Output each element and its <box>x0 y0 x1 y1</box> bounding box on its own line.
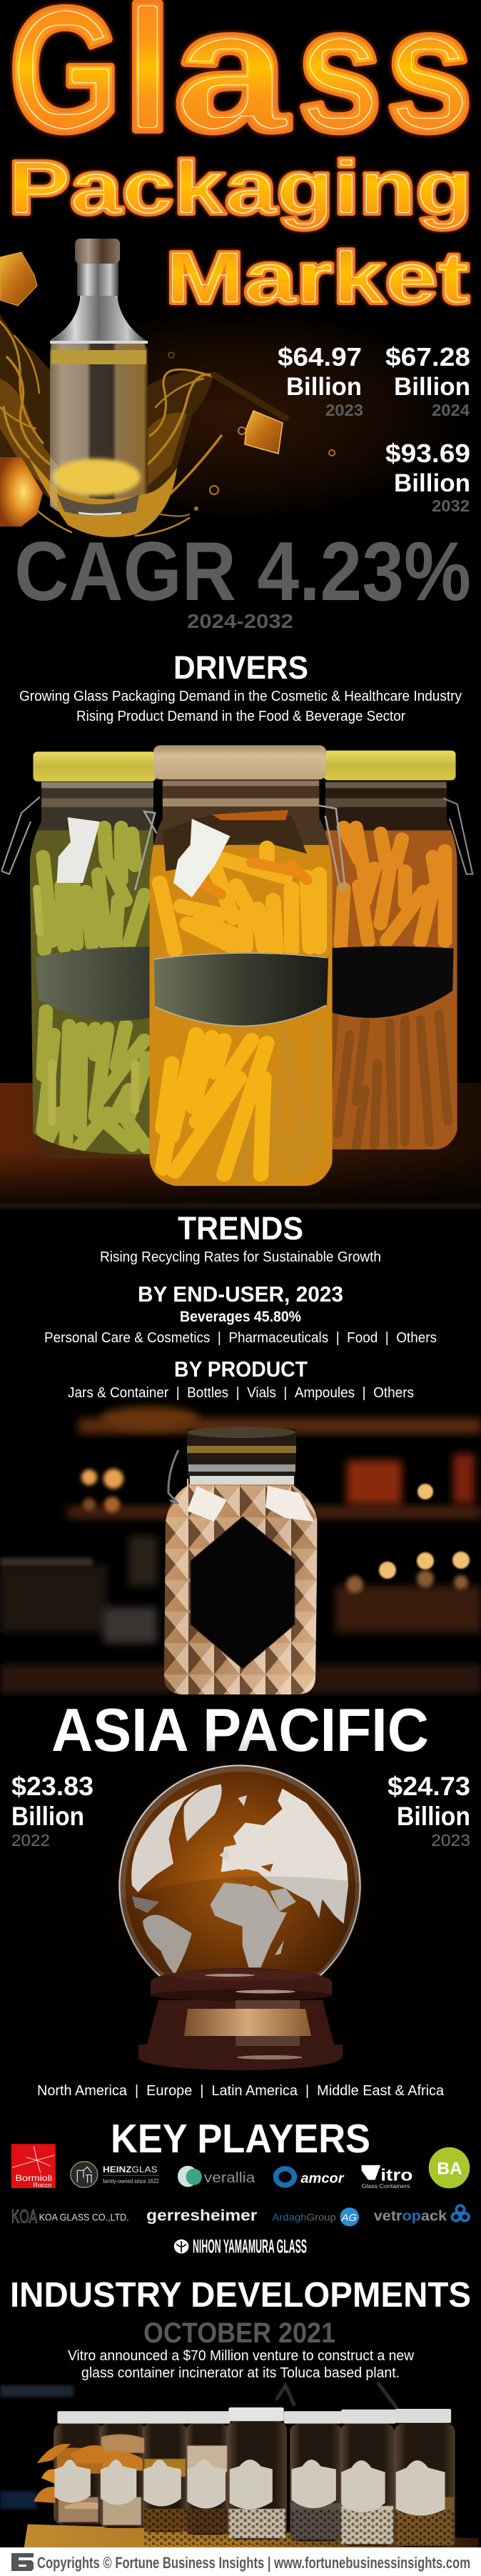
icon: Fortune Business Insights logo <box>11 2553 34 2571</box>
stat: 2022 regional value: Billion <box>11 1802 84 1831</box>
heading: industry developments: INDUSTRY DEVELOPMENTS <box>10 2276 471 2315</box>
logo: Verallia: verallia <box>204 2170 255 2186</box>
background: blurred shelf scene <box>0 1203 481 1693</box>
photo: row of jars with mushrooms <box>0 2382 479 2547</box>
text: drivers list <box>19 689 462 724</box>
stat: 2023 value: $64.97 <box>278 342 362 371</box>
logo: KOA Glass: KOA <box>11 2206 37 2227</box>
logo: Bormioli Rocco <box>11 2144 56 2188</box>
logo: Vitro: itro <box>380 2166 412 2185</box>
jar label: black hexagon <box>191 1517 295 1669</box>
logo: BA Glass: BA <box>437 2160 462 2179</box>
stand: wooden base <box>138 1968 343 2070</box>
logo: Bormioli Rocco: Rocco <box>33 2182 52 2188</box>
stat: 2022 regional value <box>11 1772 93 1849</box>
icon: bottle <box>50 239 148 514</box>
stat: 2032 value: $93.69 <box>385 439 470 468</box>
logo: Vitro: Glass Containers <box>362 2182 410 2190</box>
mushrooms <box>34 2444 104 2509</box>
text: drivers list: Growing Glass Packaging Demand in the Cosmetic & Healthcare Industry <box>19 689 462 704</box>
table <box>24 2525 479 2547</box>
jar: orange fries (right) <box>323 751 472 1154</box>
stat: 2024 value: Billion <box>394 373 470 401</box>
logo: Ardagh Group: ArdaghGroup <box>272 2212 336 2223</box>
logo: Bormioli Rocco: Bormioli <box>15 2173 52 2183</box>
stat: 2024 value <box>385 342 470 419</box>
plaque <box>184 2009 311 2036</box>
logo: Amcor <box>276 2169 345 2186</box>
label: left jar band <box>35 947 154 1021</box>
stat: 2024 value: 2024 <box>432 401 470 419</box>
text: beverages share: Beverages 45.80% <box>180 1309 301 1325</box>
text: development description: glass container incinerator at its Toluca based plant. <box>81 2365 400 2381</box>
stat: 2024 value: $67.28 <box>385 342 470 371</box>
text: trends item: Rising Recycling Rates for Sustainable Growth <box>100 1249 381 1265</box>
CAGR callout: 2024-2032 <box>187 610 293 632</box>
text: other regions: North America | Europe | Latin America | Middle East & Africa <box>37 2083 445 2099</box>
logo: KOA Glass: KOA GLASS CO.,LTD. <box>39 2212 129 2223</box>
text: development description <box>68 2348 415 2381</box>
jar: green beans (left) <box>1 752 156 1159</box>
logo: Amcor: amcor <box>300 2171 345 2186</box>
stat: 2023 value: 2023 <box>325 401 363 419</box>
stat: 2032 value: 2032 <box>432 496 470 515</box>
stat: 2022 regional value: 2022 <box>11 1831 50 1849</box>
logo: BA Glass <box>429 2147 470 2188</box>
heading: by product: BY PRODUCT <box>174 1357 308 1382</box>
footer bar <box>0 2547 481 2576</box>
title line: Market: Market <box>166 236 469 319</box>
jar contents <box>57 2434 454 2546</box>
logo: Vetropack <box>374 2205 469 2224</box>
logo: Vetropack: vetropack <box>374 2208 447 2224</box>
text: drivers list: Rising Product Demand in the Food & Beverage Sector <box>76 709 405 724</box>
icon: world globe on wooden stand <box>86 1732 393 2070</box>
icon: ice cube bottom left <box>0 457 43 526</box>
logos: key players: NIHON YAMAMURA GLASS <box>193 2235 307 2257</box>
logo: Ardagh Group <box>272 2207 359 2227</box>
logo: Nihon Yamamura Glass <box>174 2235 307 2257</box>
label: right jar band <box>327 947 454 1018</box>
title line: Packaging: Packaging <box>9 146 472 230</box>
stat: 2023 regional value: $24.73 <box>388 1772 470 1801</box>
stat: 2023 regional value <box>388 1772 470 1849</box>
heading: asia pacific: ASIA PACIFIC <box>51 1697 429 1764</box>
text: end-user segments: Personal Care & Cosmetics | Pharmaceuticals | Food | Others <box>44 1330 437 1346</box>
logo: Heinz Glas: HEINZGLAS <box>103 2165 158 2175</box>
logo: Heinz Glas: family-owned since 1622 <box>103 2178 159 2185</box>
logo: Ardagh Group: AG <box>341 2212 357 2224</box>
logo: Gerresheimer: gerresheimer <box>146 2206 258 2224</box>
map: continents <box>131 1784 348 1975</box>
bottle and splash illustration <box>0 239 467 537</box>
heading: trends: TRENDS <box>178 1210 303 1247</box>
text: development date: OCTOBER 2021 <box>143 2317 335 2349</box>
title <box>9 0 472 319</box>
heading: key players: KEY PLAYERS <box>111 2116 370 2162</box>
text: product segments: Jars & Container | Bottles | Vials | Ampoules | Others <box>68 1385 414 1401</box>
stat: 2023 regional value: Billion <box>397 1802 470 1831</box>
icon: ice cube right <box>245 411 283 454</box>
heading: drivers: DRIVERS <box>173 649 308 686</box>
heading: by end-user: BY END-USER, 2023 <box>138 1282 343 1307</box>
jar lids <box>57 2407 451 2424</box>
stat: 2032 value <box>385 439 470 515</box>
logo: Verallia <box>178 2166 255 2187</box>
logo: Heinz Glas <box>71 2162 159 2187</box>
jar: yellow fries (center) <box>135 745 345 1187</box>
jar labels <box>55 2460 445 2515</box>
market value stats <box>278 342 470 515</box>
jars row <box>54 2421 455 2547</box>
text: development description: Vitro announced a $70 Million venture to construct a new <box>68 2348 415 2364</box>
stat: 2023 regional value: 2023 <box>431 1831 470 1849</box>
title line: Glass <box>9 0 472 167</box>
logo: Vitro <box>362 2165 412 2190</box>
stat: 2022 regional value: $23.83 <box>11 1772 93 1801</box>
label: center jar band <box>154 952 328 1026</box>
stat: 2023 value: Billion <box>286 373 362 401</box>
icon: ice cube top left <box>0 252 37 306</box>
stat: 2023 value <box>278 342 363 419</box>
logo: KOA Glass <box>11 2206 129 2227</box>
stat: 2032 value: Billion <box>394 469 470 497</box>
photo: three glass jars <box>0 745 481 1214</box>
icon: faceted glass jar <box>164 1427 318 1694</box>
logos: key players <box>11 2144 470 2257</box>
